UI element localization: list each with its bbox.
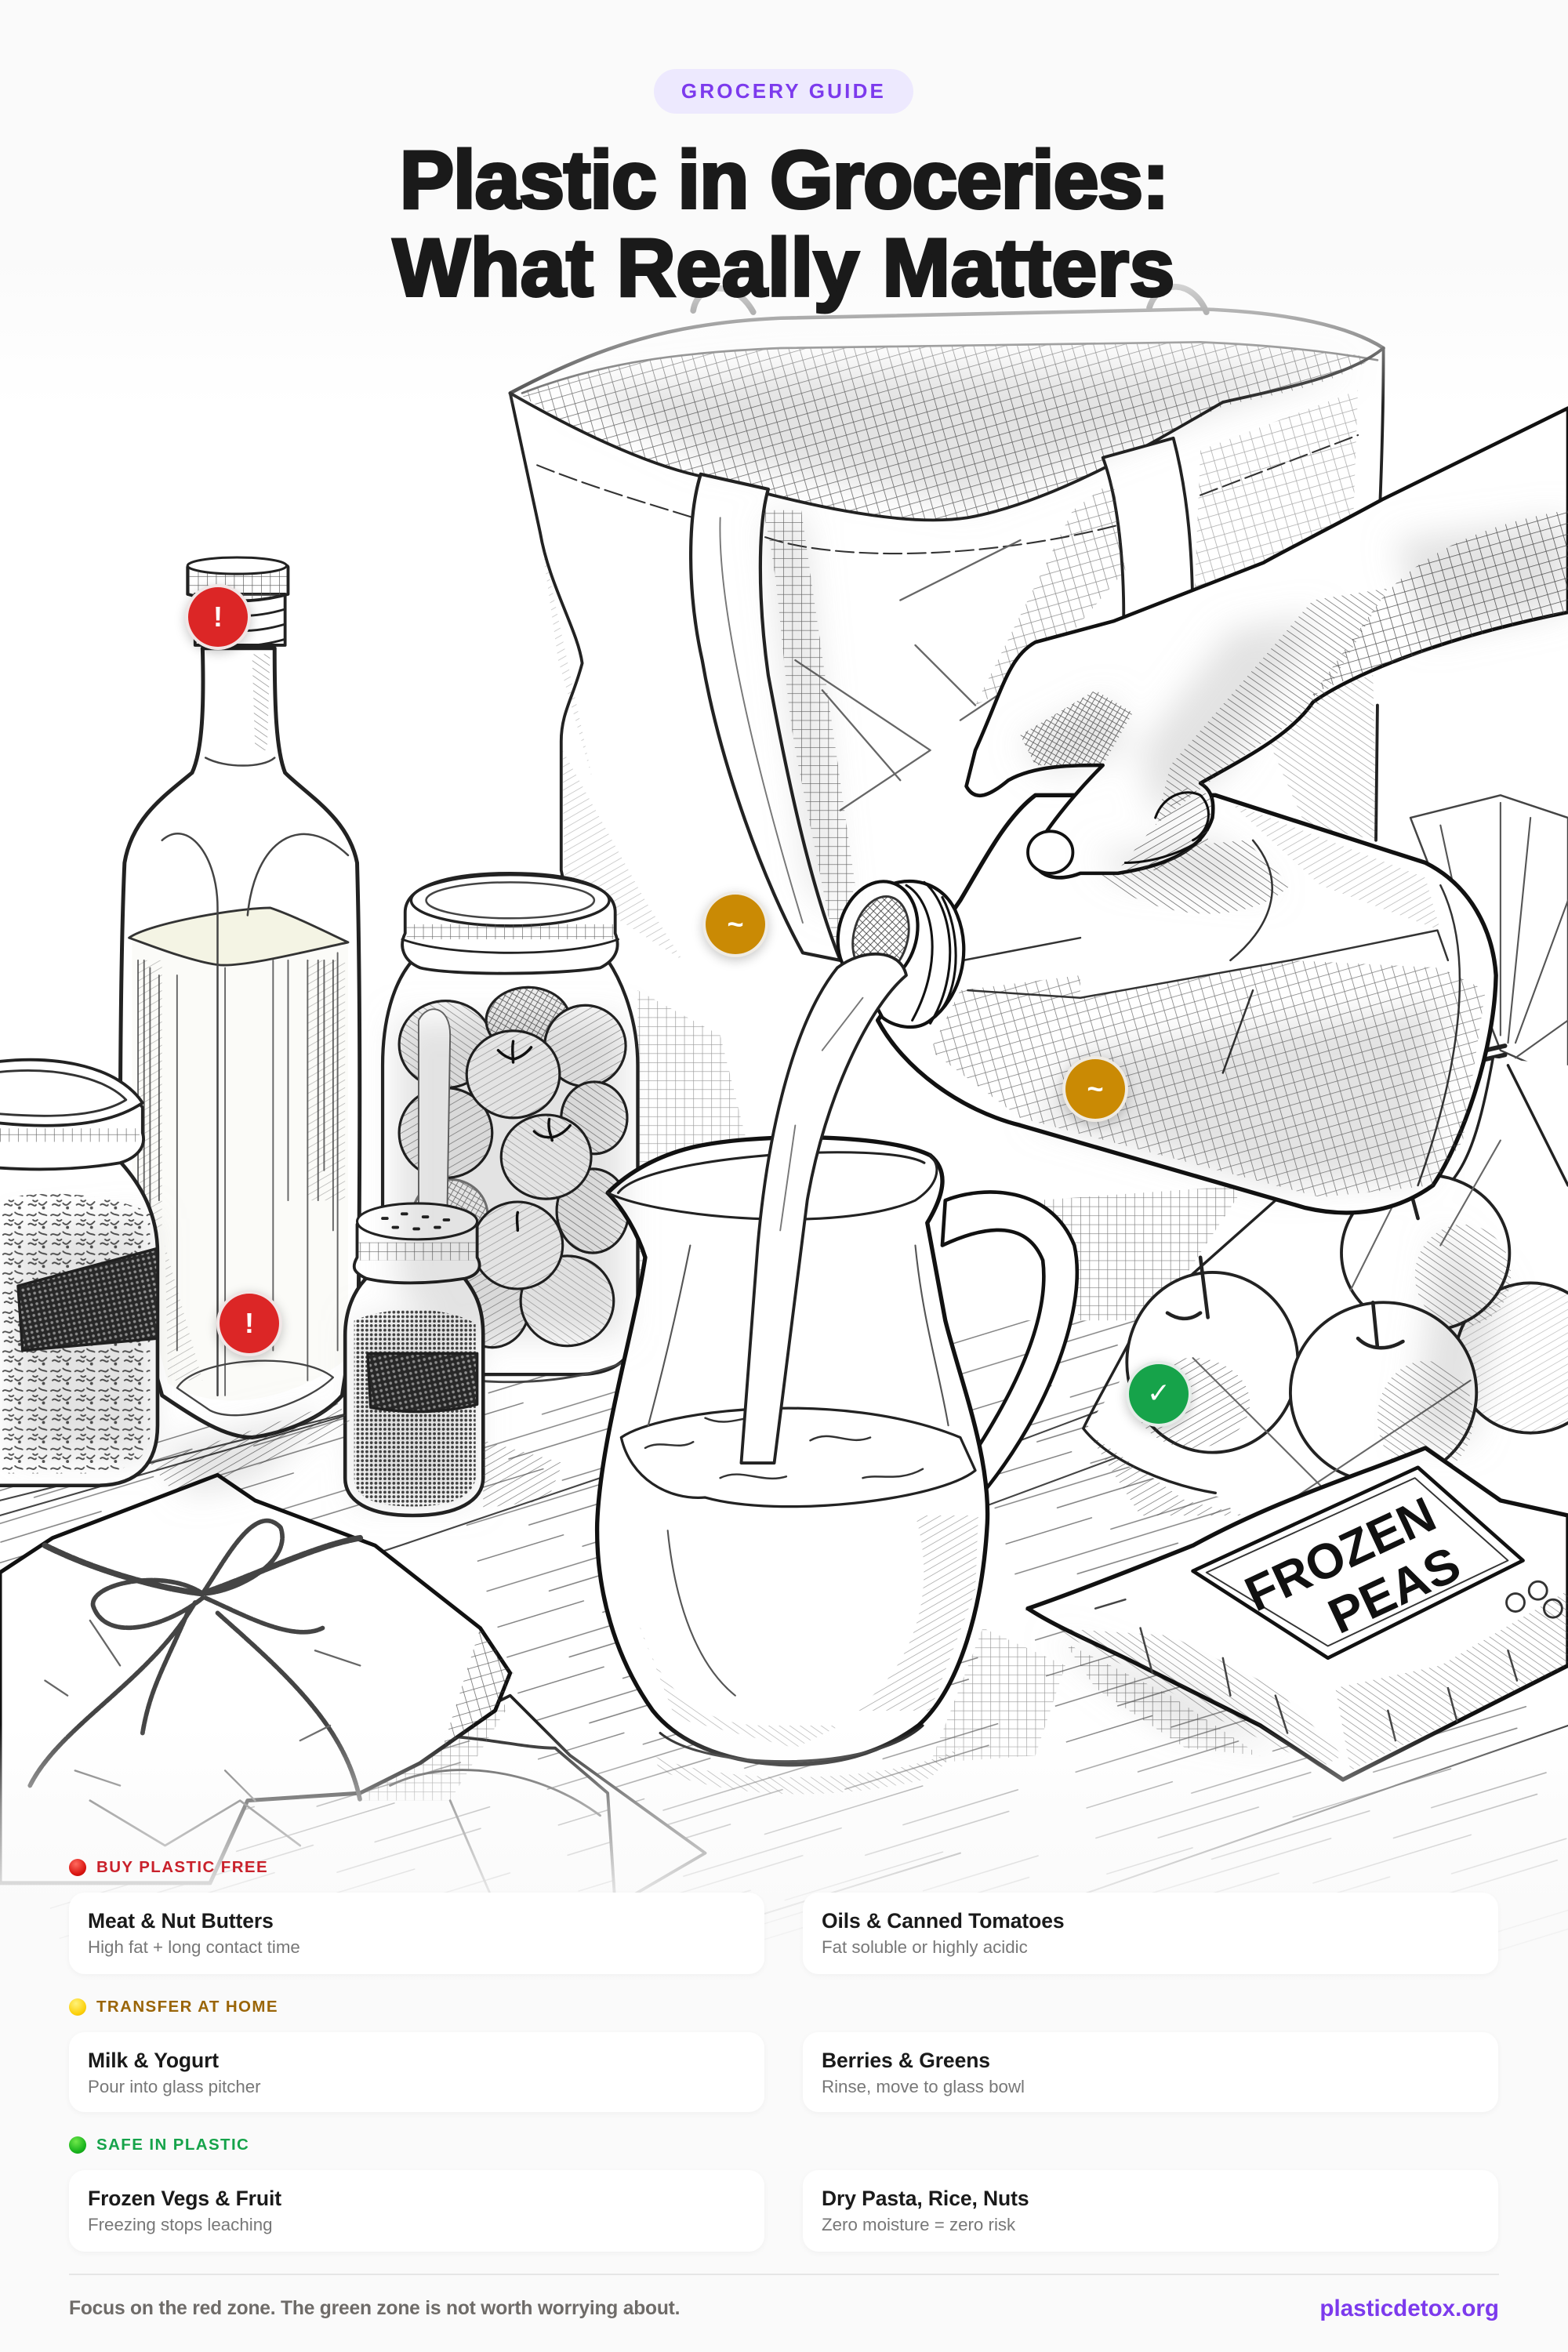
bag straps	[691, 438, 1193, 960]
pin: amber tote bag: ~	[727, 908, 744, 940]
tote bag	[510, 287, 1384, 1320]
water pitcher	[597, 1138, 1077, 1765]
pouring milk stream	[741, 954, 906, 1463]
pin: amber milk jug: ~	[1087, 1073, 1104, 1105]
apples in plastic bag	[1083, 795, 1568, 1515]
title	[390, 135, 1175, 314]
tomato jar	[383, 873, 637, 1382]
card: frozen vegs and fruit: Freezing stops leaching	[88, 2215, 273, 2234]
pin: red bottle cap: !	[213, 601, 223, 633]
card: meat and nut butters: High fat + long contact time	[88, 1937, 300, 1957]
card: milk and yogurt: Pour into glass pitcher	[88, 2077, 261, 2096]
card: oils and canned tomatoes: Oils & Canned Tomatoes	[822, 1909, 1064, 1933]
badge: grocery guide: GROCERY GUIDE	[681, 79, 886, 103]
card: meat and nut butters: Meat & Nut Butters	[88, 1909, 274, 1933]
card: berries and greens	[803, 2032, 1498, 2112]
section label: transfer at home: TRANSFER AT HOME	[96, 1998, 278, 2016]
frozen peas bag	[1028, 1448, 1568, 1780]
top background fade	[0, 0, 1568, 408]
section label: buy plastic free: BUY PLASTIC FREE	[96, 1858, 268, 1876]
footer site link: plasticdetox.org	[1319, 2296, 1499, 2321]
card: milk and yogurt: Milk & Yogurt	[88, 2049, 219, 2072]
pin: red bottle oil	[216, 1290, 282, 1356]
title: Plastic in Groceries:	[400, 135, 1168, 226]
footer note: Focus on the red zone. The green zone is not worth worrying about.	[69, 2298, 680, 2319]
table surface	[0, 1290, 1568, 1951]
card: berries and greens: Rinse, move to glass bowl	[822, 2077, 1025, 2096]
pin: green apples	[1126, 1361, 1192, 1427]
card: meat and nut butters	[69, 1893, 764, 1974]
tomatoes	[399, 987, 629, 1348]
peas label: FROZEN	[1237, 1487, 1444, 1622]
soft tonal shading	[15, 360, 1568, 1748]
card: dry pasta, rice, nuts: Zero moisture = zero risk	[822, 2215, 1015, 2234]
pin: amber tote bag	[702, 891, 768, 957]
milk jug and hand	[827, 408, 1568, 1213]
card: frozen vegs and fruit	[69, 2170, 764, 2252]
bottle neck and cap	[187, 557, 288, 750]
peas label: PEAS	[1320, 1537, 1468, 1645]
card: oils and canned tomatoes	[803, 1893, 1498, 1974]
peas label	[1193, 1468, 1523, 1658]
badge: grocery guide	[654, 69, 913, 114]
table shadows	[150, 1403, 1261, 1794]
oil bottle	[120, 557, 360, 1437]
left jar with grains	[0, 1060, 158, 1486]
hand and arm	[967, 408, 1568, 877]
wrapped meat parcels	[0, 1475, 706, 1906]
pin: amber milk jug	[1062, 1056, 1128, 1122]
pin: red bottle cap	[185, 584, 251, 650]
apples	[1127, 1175, 1568, 1483]
jug cap	[827, 873, 964, 1027]
card: frozen vegs and fruit: Frozen Vegs & Fruit	[88, 2187, 281, 2210]
card: milk and yogurt	[69, 2032, 764, 2112]
title: What Really Matters	[393, 223, 1175, 314]
card: oils and canned tomatoes: Fat soluble or highly acidic	[822, 1937, 1028, 1957]
card: berries and greens: Berries & Greens	[822, 2049, 990, 2072]
pin: green apples: ✓	[1147, 1377, 1171, 1410]
spice shaker	[345, 1203, 483, 1515]
section label: safe in plastic: SAFE IN PLASTIC	[96, 2136, 249, 2154]
card: dry pasta, rice, nuts	[803, 2170, 1498, 2252]
card: dry pasta, rice, nuts: Dry Pasta, Rice, Nuts	[822, 2187, 1029, 2210]
bottom background fade	[0, 1725, 1568, 2352]
pin: red bottle oil: !	[245, 1307, 254, 1339]
